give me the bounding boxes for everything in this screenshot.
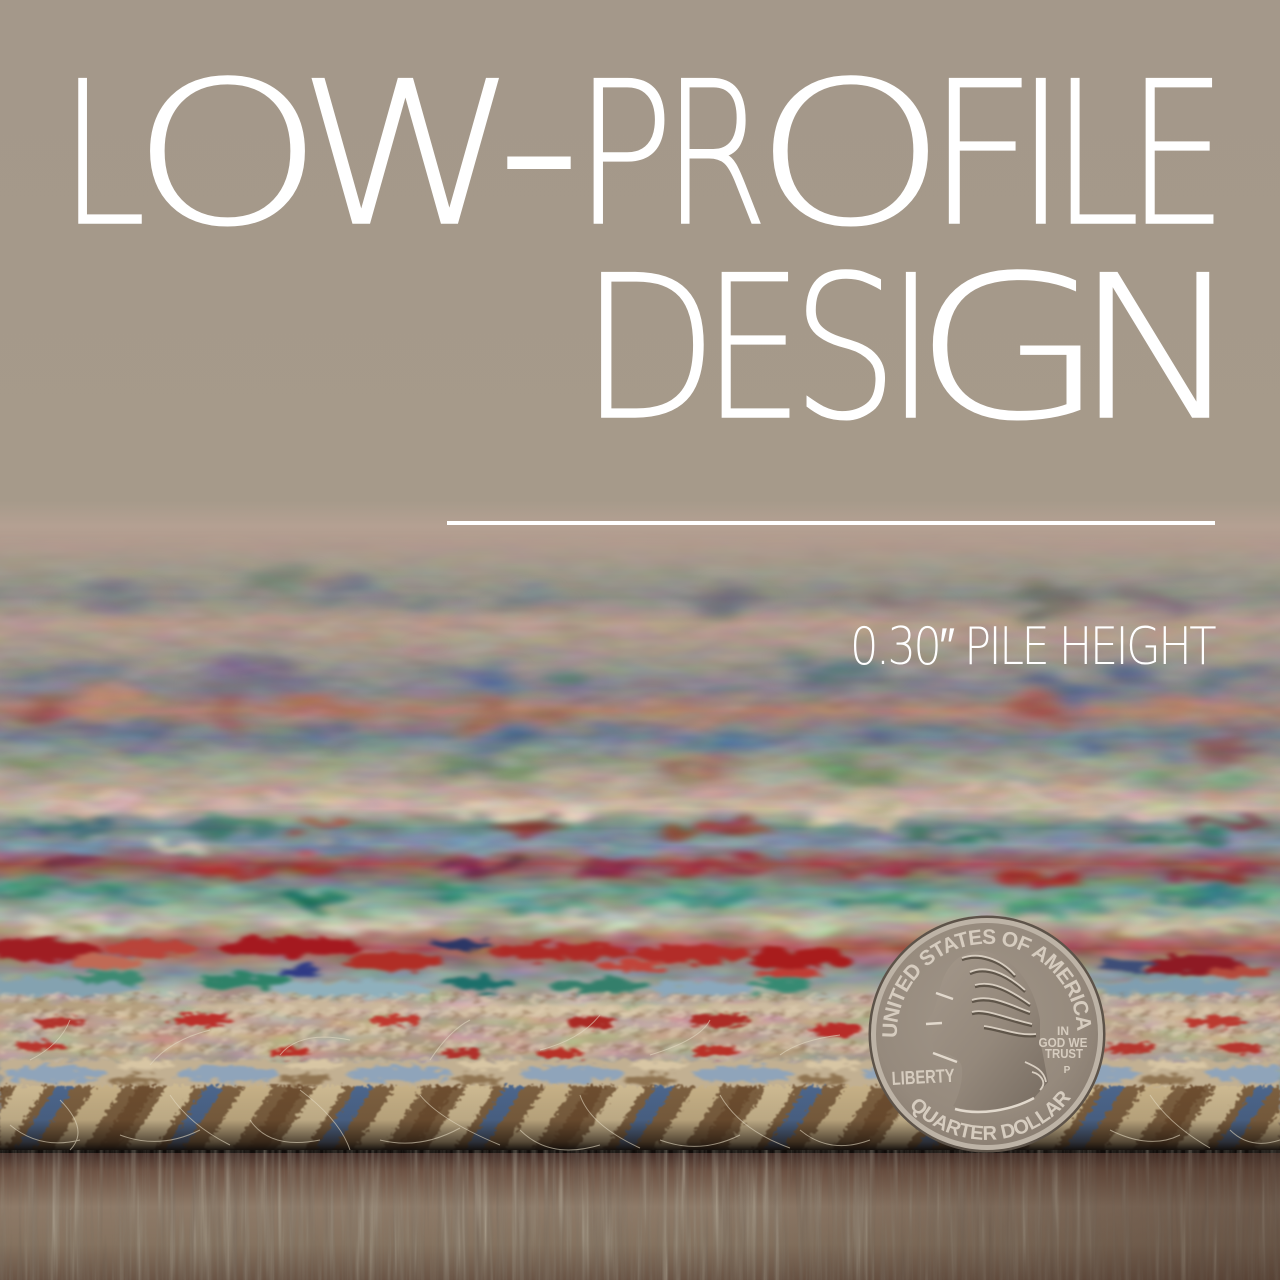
title line 2: I <box>886 233 936 464</box>
coin bust <box>925 951 1048 1112</box>
title line 1: I <box>1016 39 1066 270</box>
title line 1: R <box>663 39 768 270</box>
title line 2: S <box>792 233 898 464</box>
coin lettering: IN <box>1057 1024 1069 1038</box>
coin lettering: GOD WE <box>1038 1035 1088 1050</box>
coin lettering: QUARTER DOLLAR <box>912 1091 1071 1140</box>
title line 1: F <box>926 39 1037 270</box>
coin lettering: UNITED STATES OF AMERICA <box>882 929 1092 1037</box>
title line 2: G <box>913 233 1106 464</box>
coin lettering <box>882 929 1092 1140</box>
title <box>60 33 1243 464</box>
title line 2: D <box>580 233 718 464</box>
texture noise <box>0 570 1280 1063</box>
title line 1: E <box>1127 39 1227 270</box>
far blurred rug stripes <box>10 561 1270 788</box>
background wall <box>0 0 1280 530</box>
wood floor <box>0 1153 1280 1280</box>
braided rope edge <box>0 1015 1280 1154</box>
title line 1: P <box>574 39 674 270</box>
near red band <box>0 937 1280 1016</box>
title line 1: O <box>131 39 324 270</box>
divider rule <box>447 521 1215 525</box>
coin lettering: TRUST <box>1045 1046 1083 1061</box>
coin lettering: LIBERTY <box>891 1066 955 1090</box>
red yarn flecks <box>16 1014 1262 1059</box>
title line 1: - <box>499 33 579 264</box>
coin: US quarter <box>868 916 1106 1152</box>
title line 1: O <box>754 39 947 270</box>
blue and tan braid band <box>0 1060 1280 1092</box>
braid weave texture <box>0 995 1280 1062</box>
rug photo <box>0 500 1280 1155</box>
title line 1: L <box>60 39 146 270</box>
title line 1: W <box>297 39 519 270</box>
title line 2: E <box>703 233 803 464</box>
loose fibres <box>10 1015 1280 1150</box>
pile height label: 0.30″ PILE HEIGHT <box>850 617 1216 677</box>
title line 2: N <box>1073 233 1243 464</box>
coin lettering: P <box>1064 1065 1071 1076</box>
middle rug stripes <box>0 787 1270 931</box>
hair <box>962 956 1046 1090</box>
title line 1: L <box>1052 39 1140 270</box>
